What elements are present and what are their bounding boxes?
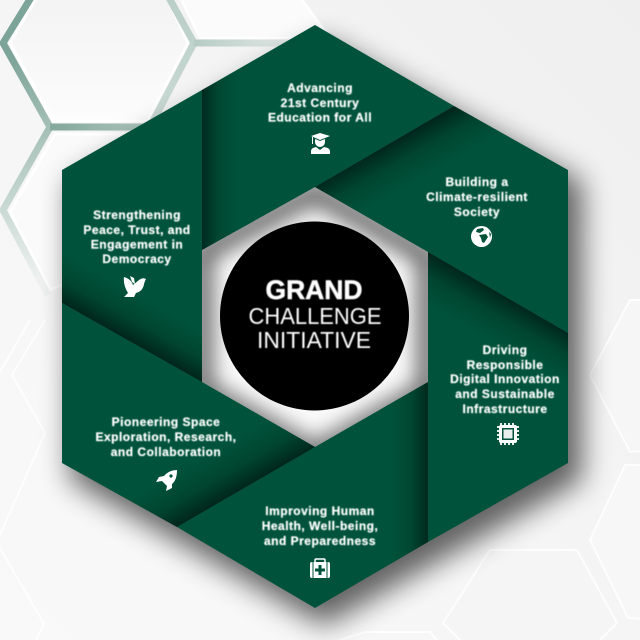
label: democracy bbox=[83, 208, 191, 266]
icon: rocket bbox=[156, 470, 177, 491]
label: space bbox=[95, 415, 237, 459]
icon: dove bbox=[124, 276, 146, 297]
panel: lower left bbox=[62, 303, 315, 527]
centre circle bbox=[220, 222, 409, 410]
label: climate bbox=[426, 175, 528, 219]
label: democracy: Engagement in bbox=[91, 238, 183, 252]
panel: upper right bbox=[315, 106, 568, 333]
title: INITIATIVE bbox=[257, 327, 371, 353]
label: climate: Society bbox=[454, 205, 500, 219]
label: space: Pioneering Space bbox=[112, 415, 220, 429]
label: education: Education for All bbox=[268, 110, 372, 124]
label: education bbox=[268, 81, 372, 124]
label: space: Exploration, Research, bbox=[95, 430, 237, 444]
panel: left bbox=[62, 90, 202, 382]
label: democracy: Strengthening bbox=[93, 208, 181, 222]
panel: top bbox=[202, 25, 454, 250]
label: health: and Preparedness bbox=[264, 534, 376, 548]
label: education: Advancing bbox=[287, 81, 353, 95]
title: GRAND bbox=[266, 275, 362, 305]
panel: bottom bbox=[177, 382, 428, 608]
label: health: Health, Well-being, bbox=[262, 519, 378, 533]
centre opening bbox=[202, 187, 428, 455]
label: health: Improving Human bbox=[265, 504, 375, 518]
label: digital: Infrastructure bbox=[462, 402, 548, 416]
label: democracy: Peace, Trust, and bbox=[83, 223, 191, 237]
title: CHALLENGE bbox=[248, 303, 382, 329]
icon: graduate bbox=[311, 133, 330, 154]
label: digital: Driving bbox=[483, 343, 527, 357]
label: health bbox=[262, 504, 378, 548]
icon: globe bbox=[471, 226, 492, 247]
label: climate: Building a bbox=[446, 175, 508, 189]
label: digital bbox=[450, 343, 560, 416]
label: digital: Responsible bbox=[467, 358, 543, 372]
icon: chip bbox=[497, 423, 519, 445]
icon: medical kit bbox=[310, 559, 330, 579]
label: democracy: Democracy bbox=[102, 252, 172, 266]
title bbox=[248, 275, 382, 353]
panel: lower right bbox=[428, 252, 568, 542]
hexagon drop shadow bbox=[70, 40, 582, 626]
label: digital: and Sustainable bbox=[455, 387, 555, 401]
label: climate: Climate-resilient bbox=[426, 190, 528, 204]
label: space: and Collaboration bbox=[111, 445, 221, 459]
label: education: 21st Century bbox=[281, 96, 359, 110]
label: digital: Digital Innovation bbox=[450, 372, 560, 386]
